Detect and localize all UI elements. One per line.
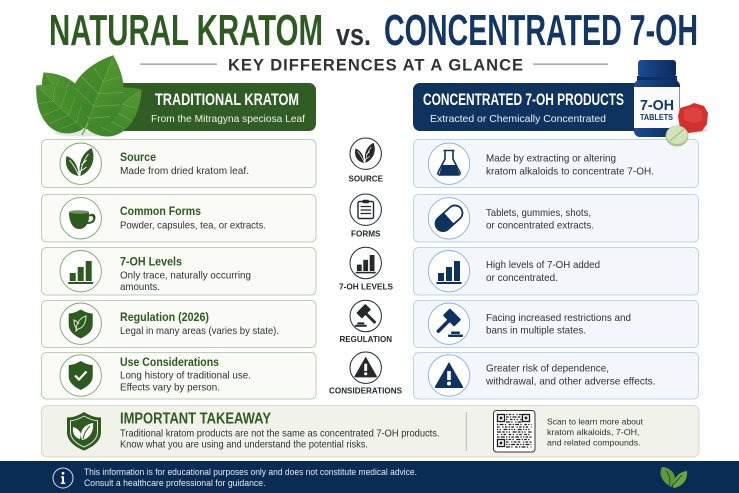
disclaimer text: This information is for educational purposes only and does not constitute medical advice. bbox=[84, 467, 417, 477]
row: tablets, gummies: Tablets, gummies, shots, bbox=[486, 207, 591, 219]
category: regulation bbox=[340, 300, 392, 344]
row: 7-OH levels bbox=[42, 248, 316, 295]
category: source bbox=[348, 138, 383, 184]
takeaway text: Traditional kratom products are not the same as concentrated 7-OH products. bbox=[120, 428, 440, 440]
disclaimer text: Consult a healthcare professional for guidance. bbox=[84, 478, 266, 488]
row: restrictions: bans in multiple states. bbox=[486, 324, 586, 336]
category: forms bbox=[350, 194, 381, 239]
row: regulation bbox=[42, 300, 316, 348]
category: considerations bbox=[329, 352, 402, 396]
row: greater risk: Greater risk of dependence, bbox=[486, 363, 609, 375]
row: source bbox=[42, 140, 316, 188]
category: 7-OH levels bbox=[339, 247, 393, 292]
title bbox=[49, 6, 698, 55]
row: common forms: Common Forms bbox=[120, 204, 201, 218]
row: 7-OH levels: Only trace, naturally occurring bbox=[120, 269, 251, 281]
banner: concentrated 7-OH: Extracted or Chemically Concentrated bbox=[430, 113, 606, 125]
row: common forms bbox=[42, 194, 316, 242]
category: forms: FORMS bbox=[351, 229, 381, 239]
row: made by extracting bbox=[414, 140, 698, 188]
row: 7-OH levels: 7-OH Levels bbox=[120, 255, 182, 269]
category: regulation: REGULATION bbox=[340, 334, 392, 344]
footer bbox=[0, 461, 739, 493]
row: tablets, gummies: or concentrated extracts. bbox=[486, 219, 594, 231]
icon: 7-OH bottle, gummy and tablet: TABLETS bbox=[640, 113, 674, 122]
disclaimer text bbox=[84, 467, 417, 488]
row: regulation: Regulation (2026) bbox=[120, 310, 209, 324]
subtitle: KEY DIFFERENCES AT A GLANCE bbox=[228, 56, 523, 74]
row: use considerations bbox=[42, 352, 316, 399]
panel: important takeaway bbox=[42, 406, 699, 457]
row: 7-OH levels: amounts. bbox=[120, 281, 160, 293]
icon: 7-OH bottle, gummy and tablet bbox=[634, 60, 708, 146]
row: greater risk: withdrawal, and other adverse effects. bbox=[485, 375, 656, 387]
heading: important takeaway: IMPORTANT TAKEAWAY bbox=[120, 410, 272, 427]
row: use considerations: Long history of traditional use. bbox=[120, 370, 251, 382]
QR caption: and related compounds. bbox=[547, 438, 640, 448]
row: high levels: or concentrated. bbox=[486, 272, 558, 284]
icon: takeaway shield bbox=[67, 412, 101, 450]
banner: traditional kratom: From the Mitragyna speciosa Leaf bbox=[151, 113, 305, 125]
row: tablets, gummies bbox=[414, 194, 698, 242]
row: restrictions: Facing increased restrictions and bbox=[486, 312, 631, 324]
row: regulation: Legal in many areas (varies by state). bbox=[120, 325, 279, 337]
panel: center categories bbox=[329, 138, 402, 396]
takeaway text: Know what you are using and understand the potential risks. bbox=[120, 438, 368, 450]
category: considerations: CONSIDERATIONS bbox=[329, 386, 402, 396]
title: NATURAL KRATOM bbox=[49, 6, 323, 55]
banner: traditional kratom: TRADITIONAL KRATOM bbox=[155, 90, 299, 109]
row: high levels bbox=[414, 248, 698, 295]
QR caption: kratom alkaloids, 7-OH, bbox=[547, 427, 640, 437]
banner: concentrated 7-OH bbox=[413, 83, 653, 131]
icon: kratom leaves bbox=[22, 46, 155, 148]
icon: 7-OH bottle, gummy and tablet: 7-OH bbox=[640, 97, 674, 114]
panel: traditional kratom rows bbox=[42, 140, 316, 399]
row: restrictions bbox=[414, 300, 698, 348]
row: source: Source bbox=[120, 150, 156, 164]
row: high levels: High levels of 7-OH added bbox=[486, 259, 600, 271]
QR code bbox=[494, 410, 535, 452]
icon: footer leaf logo bbox=[660, 467, 687, 491]
row: use considerations: Effects vary by person. bbox=[120, 382, 220, 394]
banner: concentrated 7-OH: CONCENTRATED 7-OH PRODUCTS bbox=[423, 90, 624, 109]
row: greater risk bbox=[414, 352, 698, 399]
QR caption: Scan to learn more about bbox=[547, 416, 644, 426]
banner: traditional kratom bbox=[110, 83, 316, 131]
title: vs. bbox=[336, 17, 371, 52]
row: use considerations: Use Considerations bbox=[120, 355, 219, 369]
panel: concentrated 7-OH rows bbox=[414, 140, 698, 399]
row: made by extracting: Made by extracting or altering bbox=[486, 153, 616, 165]
row: made by extracting: kratom alkaloids to concentrate 7-OH. bbox=[486, 165, 654, 177]
takeaway text bbox=[120, 428, 440, 450]
category: source: SOURCE bbox=[348, 174, 383, 184]
icon: info bbox=[53, 468, 73, 488]
row: common forms: Powder, capsules, tea, or extracts. bbox=[120, 219, 266, 231]
row: source: Made from dried kratom leaf. bbox=[120, 165, 249, 177]
QR caption bbox=[547, 416, 644, 448]
category: 7-OH levels: 7-OH LEVELS bbox=[339, 282, 393, 292]
